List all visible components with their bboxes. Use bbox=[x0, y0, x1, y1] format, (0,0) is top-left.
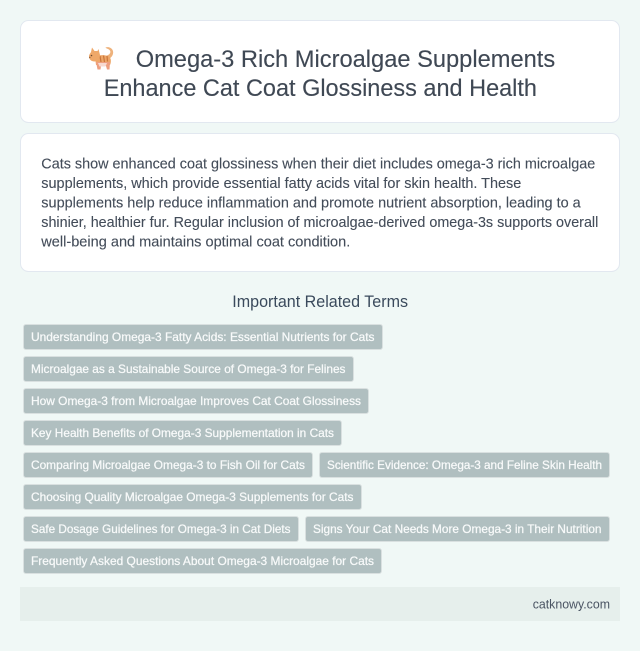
tag: safe dosage: Safe Dosage Guidelines for Omega-3 in Cat Diets bbox=[31, 522, 290, 536]
summary text: Cats show enhanced coat glossiness when their diet includes omega-3 rich microalgae bbox=[41, 156, 595, 172]
tag: scientific evidence: Scientific Evidence: Omega-3 and Feline Skin Health bbox=[327, 458, 602, 472]
tag: choosing quality: Choosing Quality Microalgae Omega-3 Supplements for Cats bbox=[31, 490, 354, 504]
term tags bbox=[24, 324, 610, 574]
panel: summary card bbox=[20, 134, 620, 272]
tag: safe dosage bbox=[24, 516, 298, 542]
panel: title card bbox=[20, 20, 620, 122]
title: Omega-3 Rich Microalgae Supplements bbox=[136, 46, 555, 73]
summary text bbox=[40, 156, 598, 250]
tag: sustainable source: Microalgae as a Sustainable Source of Omega-3 for Felines bbox=[31, 362, 346, 376]
tag: health benefits: Key Health Benefits of Omega-3 Supplementation in Cats bbox=[31, 426, 334, 440]
footer site name: catknowy.com bbox=[533, 597, 610, 611]
title: Enhance Cat Coat Glossiness and Health bbox=[104, 75, 537, 102]
tag: faq bbox=[24, 548, 382, 574]
footer bar bbox=[20, 587, 620, 621]
summary text: supplements, which provide essential fatty acids vital for skin health. These bbox=[41, 176, 521, 192]
tag: fish oil comparison: Comparing Microalgae Omega-3 to Fish Oil for Cats bbox=[31, 458, 305, 472]
tag: coat glossiness: How Omega-3 from Microalgae Improves Cat Coat Glossiness bbox=[31, 394, 361, 408]
tag: understanding omega-3 bbox=[24, 324, 382, 350]
tag: signs: Signs Your Cat Needs More Omega-3 in Their Nutrition bbox=[313, 522, 602, 536]
tag: fish oil comparison bbox=[24, 452, 312, 478]
summary text: supplements help reduce inflammation and promote nutrient absorption, leading to a bbox=[41, 195, 582, 211]
summary text: well-being and maintains optimal coat condition. bbox=[40, 234, 350, 250]
tag: sustainable source bbox=[24, 356, 354, 382]
tag: faq: Frequently Asked Questions About Omega-3 Microalgae for Cats bbox=[31, 554, 374, 568]
icon: orange cat bbox=[89, 47, 113, 70]
heading: important related terms: Important Related Terms bbox=[232, 293, 408, 311]
title bbox=[104, 46, 555, 102]
tag: choosing quality bbox=[24, 484, 362, 510]
summary text: shinier, healthier fur. Regular inclusion of microalgae-derived omega-3s supports overall bbox=[41, 215, 598, 231]
tag: health benefits bbox=[24, 420, 342, 446]
tag: understanding omega-3: Understanding Omega-3 Fatty Acids: Essential Nutrients for Cats bbox=[31, 330, 374, 344]
tag: scientific evidence bbox=[320, 452, 610, 478]
tag: signs bbox=[306, 516, 610, 542]
tag: coat glossiness bbox=[24, 388, 368, 414]
